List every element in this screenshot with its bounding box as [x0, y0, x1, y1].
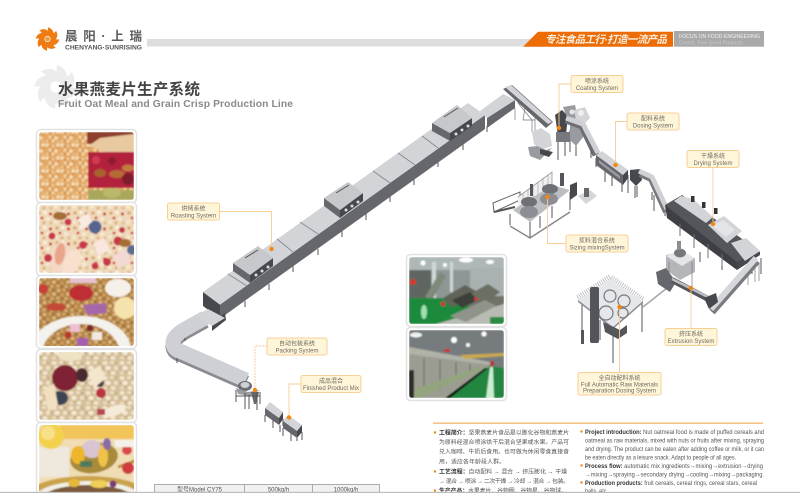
- focus badge: Cereal, Fine Seed Products: [679, 40, 744, 46]
- machine: dosing unit: [596, 151, 628, 193]
- title: 水果燕麦片生产系统: [58, 80, 200, 98]
- machine: dryer outlet conveyor: [711, 258, 759, 312]
- callout: extrusion system: Extrusion System: [668, 339, 714, 345]
- callout: raw materials dosing: [578, 305, 661, 395]
- machine: coating outlet conveyor: [566, 118, 598, 167]
- photo: peach and blueberry: [39, 205, 137, 278]
- callout: dosing system: [613, 113, 679, 167]
- callout: roasting system: [168, 203, 274, 251]
- callout: raw materials dosing: 全自动配料系统: [598, 374, 641, 382]
- callout: packing system: 自动包装系统: [279, 340, 315, 348]
- photo: oven hall: [409, 330, 504, 398]
- transfer section: [480, 94, 515, 128]
- photo: oats with cherries: [39, 351, 134, 420]
- text block: chinese description: 为原料经混合喷涂烘干后混合坚果或水果。产品可: [439, 438, 569, 446]
- subtitle: Fruit Oat Meal and Grain Crisp Production Line: [58, 99, 293, 110]
- machine: discharge conveyor: [173, 309, 246, 383]
- machine: extrusion system: [643, 241, 718, 309]
- text block: english description: Production products: fruit cereals, cereal rings, cereal stars, cereal: [585, 480, 757, 487]
- header band: [147, 31, 764, 47]
- callout: drying system: 干燥系统: [701, 152, 725, 160]
- company name latin: CHENYANG·SUNRISING: [65, 44, 142, 52]
- callout: sizing mixing: 浆料混合系统: [579, 236, 615, 244]
- photo: packing hall: [409, 257, 504, 324]
- callout: drying system: Drying System: [693, 161, 733, 167]
- machine: packing unit: [236, 381, 260, 410]
- callout: sizing mixing: Sizing mixingSystem: [569, 246, 625, 252]
- callout: finished product mix: Finished Product Mix: [303, 386, 359, 392]
- slogan ribbon: [523, 32, 673, 47]
- oven legs: [245, 126, 487, 307]
- machine: raw material dosing: [578, 277, 643, 363]
- text block: english description: Process flow: automatic mix ingredients→mixing→extrusion→drying: [585, 463, 763, 470]
- oven body: [203, 103, 485, 319]
- panel: factory photos: [406, 254, 506, 400]
- text block: chinese description: → 混合 → 喷涂 → 二次干燥 → 冷却 → 混合 → 包装。: [439, 477, 569, 485]
- text block: english description: oatmeal as raw materials, mixed with nuts or fruits after mixing, spraying: [585, 438, 764, 444]
- table: capacity: [154, 484, 380, 493]
- machine: incline conveyor two: [630, 169, 667, 216]
- icon: orange pinwheel: [35, 26, 60, 52]
- text block: english description: be eaten directly as a leisure snack. Adapt to people of all ages.: [585, 454, 736, 462]
- text block: english description: →mixing→spraying→secondary drying→cooling→mixing→packaging.: [585, 472, 764, 478]
- callout: dosing system: Dosing System: [633, 124, 673, 130]
- text block: chinese description: 工程简介：坚果燕麦片食品是以膨化谷物和燕麦片: [439, 428, 569, 436]
- focus badge: [674, 31, 764, 47]
- machine: coating system: [528, 105, 590, 160]
- machine: incline conveyor: [503, 85, 553, 135]
- panel: food photos: [36, 128, 138, 492]
- oven hood 2: [324, 182, 363, 218]
- oven hood 1: [233, 246, 273, 283]
- callout: coating system: Coating System: [576, 86, 618, 92]
- slogan: 专注食品工行·打造一流产品: [545, 33, 668, 46]
- callout: coating system: [557, 76, 623, 130]
- callout: dosing system: 配料系统: [641, 114, 665, 122]
- photo: granola bowl: [39, 278, 134, 346]
- focus badge: FOCUS ON FOOD ENGINEERING: [679, 34, 760, 40]
- callout: drying system: [687, 150, 739, 226]
- callout: finished product mix: 成品混合: [319, 377, 343, 385]
- callout: sizing mixing: [545, 195, 628, 252]
- machine: roasting oven line: [203, 94, 515, 319]
- callout: roasting system: Roasting System: [171, 214, 216, 220]
- callout: coating system: 喷涂系统: [585, 77, 609, 85]
- callout: raw materials dosing: Full Automatic Raw Materials: [581, 382, 658, 388]
- photo: spoon and bowl: [39, 425, 134, 492]
- callout: packing system: Packing System: [275, 348, 319, 354]
- oven hood 3: [432, 105, 472, 141]
- photo: crumbs and berries: [39, 132, 134, 200]
- watermark pinwheel: [33, 64, 79, 110]
- callout: packing system: [253, 338, 327, 392]
- callout: extrusion system: [665, 286, 717, 346]
- text block: english description: [580, 429, 764, 493]
- text block: chinese description: 兑入咖啡、牛奶后食用。也可做为休闲零食直接食: [439, 448, 569, 456]
- text block: chinese description: [434, 428, 569, 493]
- text block: chinese description: 工艺流程：自动配料 → 混合 → 挤压膨化 → 干燥: [439, 468, 567, 476]
- company name: 晨阳·上瑞: [65, 28, 142, 44]
- machine: sizing mixing: [493, 172, 597, 238]
- callout: roasting system: 烘烤系统: [181, 204, 206, 212]
- callout: extrusion system: 挤压系统: [679, 330, 703, 338]
- text block: chinese description: 用，适应各年龄段人群。: [439, 458, 505, 466]
- machine: finished product mixers: [265, 402, 302, 441]
- callout: raw materials dosing: Preparation Dosing System: [583, 388, 656, 394]
- text block: english description: Project introduction: Nut oatmeal food is made of puffed cereals and: [585, 429, 764, 436]
- header logo: [35, 26, 142, 52]
- divider line: [433, 422, 763, 424]
- machine: drying system: [665, 195, 761, 274]
- text block: english description: and drying. The product can be eaten after adding coffee or milk, or it can: [585, 446, 764, 453]
- callout: finished product mix: [287, 376, 361, 420]
